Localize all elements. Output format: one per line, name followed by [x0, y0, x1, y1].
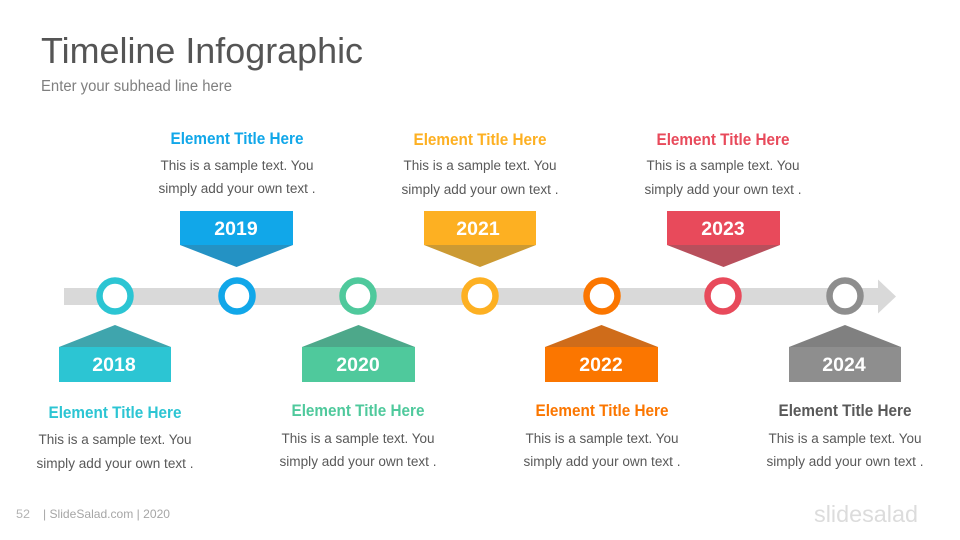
text 2024: simply add your own text .: [766, 454, 924, 469]
tag 2018: [59, 325, 171, 382]
milestone 2023: [644, 130, 802, 312]
tag 2023: 2023: [701, 218, 745, 240]
text 2023: This is a sample text. You: [646, 158, 800, 173]
milestone 2020: [280, 280, 436, 469]
tag 2019: 2019: [214, 218, 258, 240]
text 2022: This is a sample text. You: [526, 431, 678, 446]
logo wordmark: slidesalad: [814, 501, 918, 527]
footer page number: 52: [16, 507, 30, 521]
title: Timeline Infographic: [41, 30, 363, 71]
tag 2022: [545, 325, 658, 382]
tag 2019: [180, 211, 293, 267]
text 2019: simply add your own text .: [158, 181, 316, 196]
text 2022: [524, 401, 680, 469]
text 2020: [280, 401, 436, 469]
marker 2024: [830, 280, 860, 312]
text 2023: Element Title Here: [656, 130, 790, 149]
tag 2021: [424, 211, 536, 267]
tag 2018: 2018: [92, 354, 136, 376]
text 2020: This is a sample text. You: [282, 431, 434, 446]
text 2023: [644, 130, 802, 197]
tag 2021: 2021: [456, 218, 500, 240]
marker 2020: [342, 280, 374, 312]
timeline arrow: [64, 280, 896, 314]
tag 2024: 2024: [822, 354, 866, 376]
tag 2020: 2020: [336, 354, 380, 376]
tag 2020: [302, 325, 415, 382]
milestone 2021: [402, 130, 558, 312]
milestone 2024: [766, 280, 924, 469]
tag 2023: [667, 211, 780, 267]
tag 2022: 2022: [579, 354, 623, 376]
text 2019: [158, 129, 316, 196]
text 2022: simply add your own text .: [524, 454, 680, 469]
text 2020: Element Title Here: [292, 401, 424, 420]
text 2018: simply add your own text .: [36, 456, 194, 471]
tag 2024: [789, 325, 901, 382]
text 2019: This is a sample text. You: [160, 158, 314, 173]
text 2018: Element Title Here: [48, 403, 182, 422]
footer credit: | SlideSalad.com | 2020: [43, 507, 170, 521]
text 2018: [36, 403, 194, 471]
text 2021: This is a sample text. You: [404, 158, 556, 173]
text 2021: [402, 130, 558, 197]
milestone 2019: [158, 129, 316, 312]
marker 2019: [222, 280, 252, 312]
text 2022: Element Title Here: [536, 401, 668, 420]
text 2021: Element Title Here: [414, 130, 546, 149]
marker 2018: [100, 280, 130, 312]
text 2020: simply add your own text .: [280, 454, 436, 469]
text 2024: [766, 401, 924, 469]
text 2023: simply add your own text .: [644, 182, 802, 197]
marker 2023: [708, 280, 738, 312]
text 2024: Element Title Here: [778, 401, 912, 420]
subhead: Enter your subhead line here: [41, 78, 232, 95]
text 2018: This is a sample text. You: [38, 432, 192, 447]
text 2024: This is a sample text. You: [768, 431, 922, 446]
milestone 2018: [36, 280, 194, 471]
marker 2022: [586, 280, 618, 312]
marker 2021: [464, 280, 496, 312]
milestone 2022: [524, 280, 680, 469]
text 2021: simply add your own text .: [402, 182, 558, 197]
text 2019: Element Title Here: [170, 129, 304, 148]
